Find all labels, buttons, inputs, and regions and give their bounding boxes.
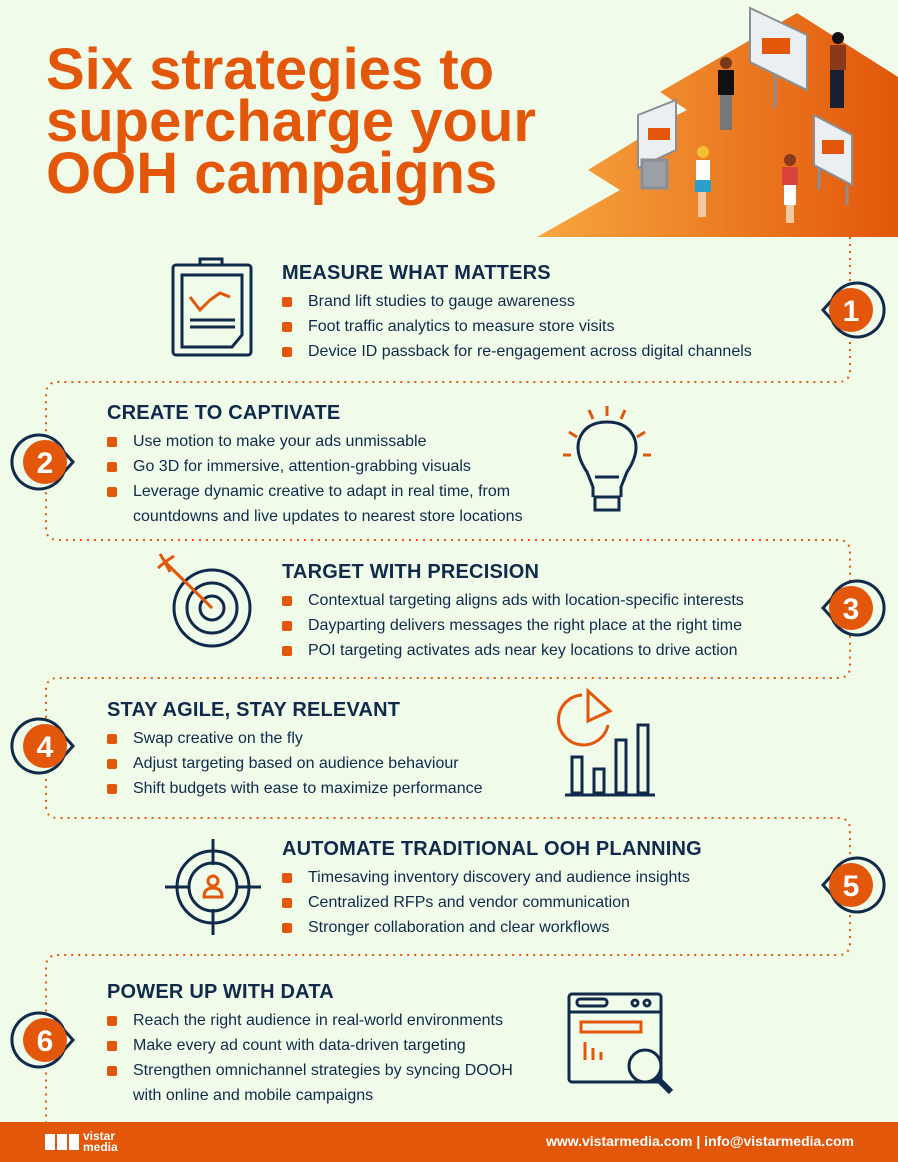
section 5 text: Timesaving inventory discovery and audience insights [308,869,690,886]
logo [45,1129,118,1154]
section 5 text: Stronger collaboration and clear workflows [308,919,609,936]
section 3 icon: target with arrow [157,553,252,648]
badge 3 [823,581,884,635]
section 3 text [282,561,744,659]
logo: vistar [83,1129,115,1143]
section 3 text: Dayparting delivers messages the right place at the right time [308,617,742,634]
section 6 text: POWER UP WITH DATA [107,981,334,1003]
section 1 text [282,262,752,360]
badge 4: 4 [37,731,54,764]
section 6 text: Make every ad count with data-driven targeting [133,1037,466,1054]
section 6 icon: browser with magnifier [568,992,674,1094]
people [718,57,734,130]
section 3 text: POI targeting activates ads near key locations to drive action [308,642,738,659]
section 5 text: Centralized RFPs and vendor communication [308,894,630,911]
badge 3: 3 [843,593,859,626]
section 2 text [107,402,523,525]
section 2 text: Go 3D for immersive, attention-grabbing visuals [133,458,471,475]
badge 1: 1 [843,295,859,328]
section 1 text: MEASURE WHAT MATTERS [282,262,551,284]
title: Six strategies to [46,37,494,102]
section 1 text: Brand lift studies to gauge awareness [308,293,575,310]
section 2 text: Leverage dynamic creative to adapt in real time, from [133,483,510,500]
title: OOH campaigns [46,141,497,206]
section 6 text: Strengthen omnichannel strategies by syncing DOOH [133,1062,513,1079]
billboards [638,8,852,185]
section 5 text [282,838,702,936]
footer [0,1122,898,1162]
section 4 text: Shift budgets with ease to maximize performance [133,780,482,797]
section 2 text: CREATE TO CAPTIVATE [107,402,340,424]
badge 2: 2 [37,447,53,480]
contact text: www.vistarmedia.com | info@vistarmedia.com [546,1133,854,1149]
section 6 text: Reach the right audience in real-world environments [133,1012,503,1029]
title [46,37,536,206]
section 1 text: Foot traffic analytics to measure store visits [308,318,614,335]
section 4 text: Adjust targeting based on audience behaviour [133,755,459,772]
section 4 text: STAY AGILE, STAY RELEVANT [107,699,400,721]
badge 4 [12,719,73,773]
section 4 icon: bar chart with pie [557,688,655,796]
section 6 text [107,981,513,1104]
section 2 icon: lightbulb [563,406,651,512]
section 5 icon: crosshair with person [165,839,261,935]
section 3 text: TARGET WITH PRECISION [282,561,539,583]
section 4 text: Swap creative on the fly [133,730,303,747]
title: supercharge your [46,89,536,154]
badge 1 [823,283,884,337]
section 2 text: countdowns and live updates to nearest store locations [133,508,523,525]
section 4 text [107,699,482,797]
section 1 text: Device ID passback for re-engagement across digital channels [308,343,752,360]
section 5 text: AUTOMATE TRADITIONAL OOH PLANNING [282,838,702,860]
illustration: isometric street with billboards [537,6,898,237]
badge 6 [12,1013,73,1067]
section 6 text: with online and mobile campaigns [133,1087,373,1104]
badge 6: 6 [37,1025,53,1058]
logo: media [83,1140,118,1154]
section 1 icon: clipboard chart [172,258,252,356]
section 2 text: Use motion to make your ads unmissable [133,433,426,450]
section 3 text: Contextual targeting aligns ads with location-specific interests [308,592,744,609]
badge 5 [823,858,884,912]
badge 2 [12,435,73,489]
badge 5: 5 [843,870,859,903]
